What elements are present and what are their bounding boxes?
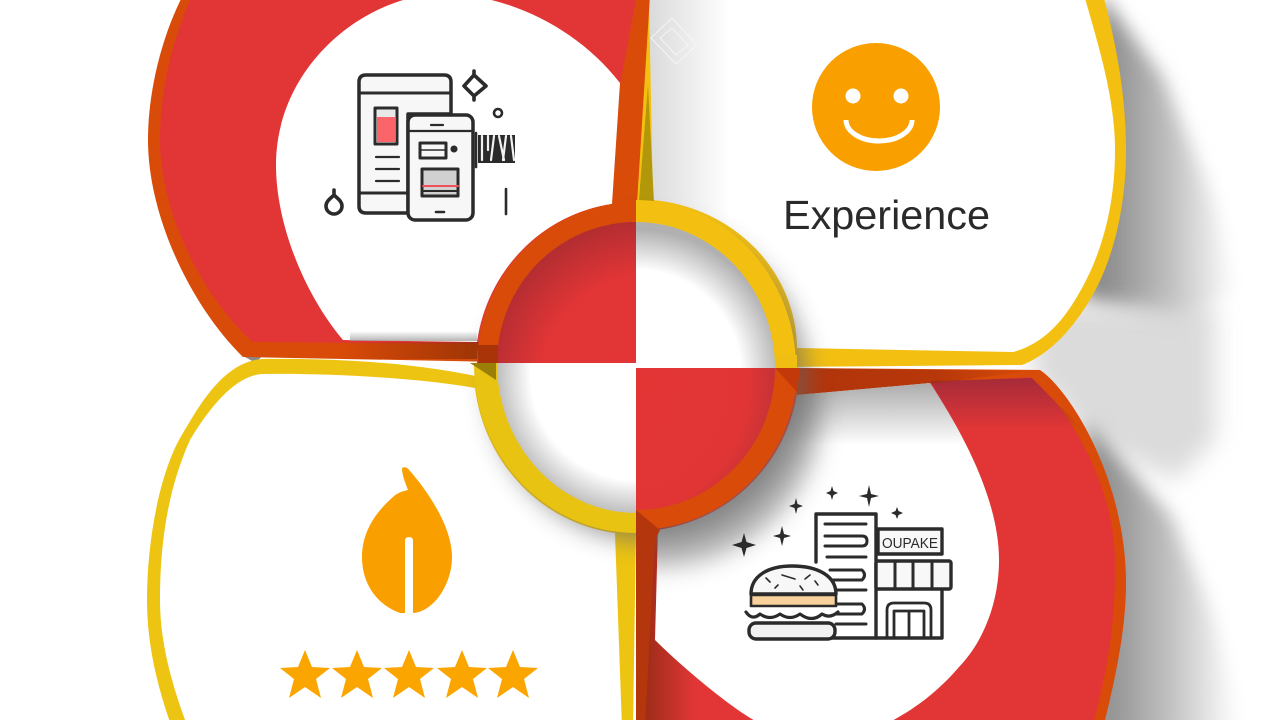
- bottom-right white area: [655, 383, 999, 720]
- icon: tablet and phone: [326, 71, 515, 220]
- bottom-left white area: [160, 374, 622, 720]
- left strip shading: [636, 520, 696, 720]
- leaf slit: [405, 537, 413, 614]
- white area inner shading: [657, 383, 962, 580]
- faint diamond watermark: [651, 18, 697, 64]
- smile: [846, 120, 912, 141]
- droplet: [326, 190, 342, 214]
- white area left shading: [649, 0, 712, 216]
- hub shadow: [488, 222, 808, 542]
- panel shadows: [243, 0, 1242, 720]
- burger: [746, 566, 838, 639]
- hub quarter white bottom-left: [497, 363, 636, 513]
- panel: top-left red: [148, 0, 650, 362]
- bottom-right red band: [640, 377, 1115, 720]
- hub ring bottom-left: [474, 363, 636, 533]
- hub ring top-right: [636, 200, 796, 368]
- white area bottom shading: [350, 331, 477, 341]
- band top shading: [930, 378, 1085, 432]
- bottom strip shading: [340, 342, 500, 359]
- hub ring bottom-right: [636, 368, 797, 530]
- sparkles: [732, 485, 903, 557]
- diamond sparkle: [464, 71, 486, 100]
- top-right white area: [649, 0, 1115, 352]
- storefront: [876, 529, 951, 638]
- panel: top-right white: [636, 0, 1126, 367]
- icon: burger and restaurant: [732, 485, 951, 639]
- hub quarter red top-left: [497, 222, 636, 363]
- icon: orange leaf drop: [362, 467, 452, 614]
- central hub: [474, 200, 797, 533]
- top-left red band: [160, 0, 637, 344]
- building tower: [816, 514, 876, 638]
- olive seam: [637, 85, 654, 225]
- connector notches: [470, 345, 800, 720]
- phone: [408, 115, 473, 220]
- glitch tag: [476, 133, 515, 167]
- vertical tick: [505, 189, 507, 214]
- hub quarter white top-right: [636, 222, 775, 368]
- top strip shading: [795, 368, 1030, 397]
- hub quarter red bottom-right: [636, 368, 775, 510]
- panel: bottom-right red: [645, 368, 1126, 720]
- icon: smiley: [812, 43, 940, 171]
- top-left white area: [276, 0, 620, 342]
- storefront: OUPAKE: [882, 535, 938, 552]
- hub ring top-left: [477, 202, 636, 363]
- eyes: [846, 88, 908, 104]
- tablet: [359, 75, 451, 213]
- label: Experience: Experience: [783, 192, 990, 238]
- five star rating: [280, 650, 538, 698]
- panel: bottom-left white: [147, 359, 636, 720]
- small circle: [494, 109, 502, 117]
